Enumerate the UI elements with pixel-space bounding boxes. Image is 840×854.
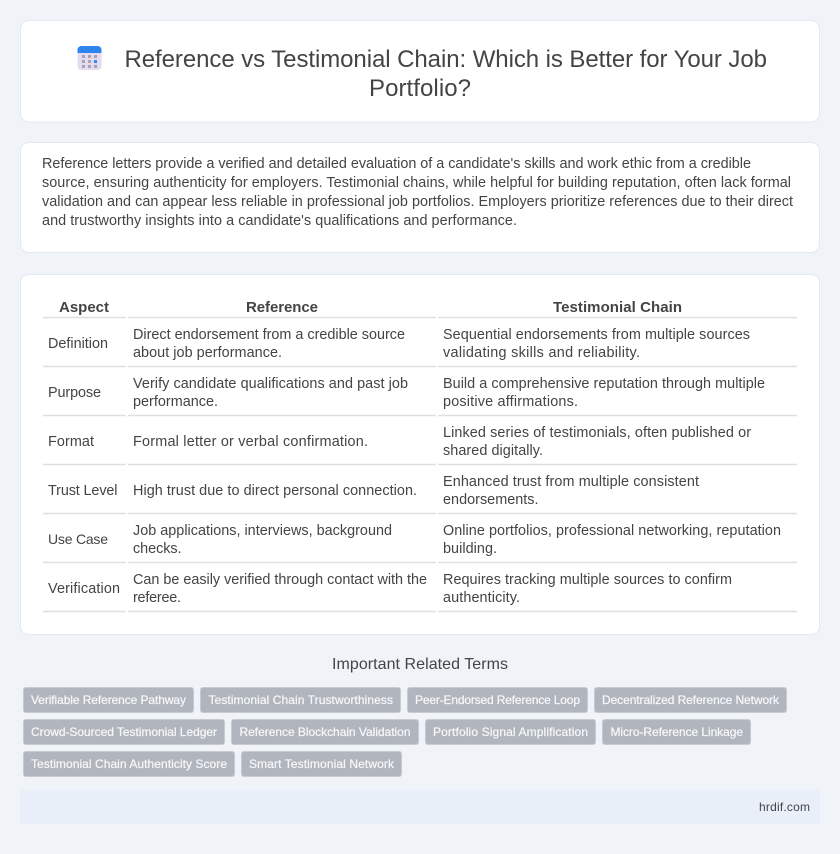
related terms tags	[24, 688, 786, 776]
title: Portfolio?	[369, 75, 471, 102]
panel: summary text	[20, 142, 820, 252]
tag	[426, 720, 596, 744]
tag	[24, 752, 234, 776]
row: trust level	[48, 474, 699, 508]
panel: comparison table	[20, 274, 820, 634]
row: definition: about job performance.	[133, 345, 282, 361]
icon: calendar	[78, 46, 102, 70]
panel: summary text: and trustworthy insights into a candidate's qualifications and performance.	[42, 213, 517, 229]
footer	[20, 790, 820, 824]
row: purpose: Verify candidate qualifications and past job	[133, 376, 408, 392]
title	[124, 46, 767, 102]
tag	[594, 688, 786, 712]
row: definition: validating skills and reliability.	[443, 345, 640, 361]
row: purpose: performance.	[133, 394, 218, 410]
row: trust level: endorsements.	[443, 492, 538, 508]
row: use case: Use Case	[48, 531, 108, 547]
row: verification	[48, 572, 732, 606]
row: use case: checks.	[133, 541, 182, 557]
row: verification: Can be easily verified through contact with the	[133, 572, 427, 588]
tag: Decentralized Reference Network	[602, 693, 780, 707]
row: purpose: positive affirmations.	[443, 394, 578, 410]
tag	[24, 688, 194, 712]
row: format: Linked series of testimonials, often published or	[443, 425, 751, 441]
tag: Reference Blockchain Validation	[240, 725, 410, 739]
tag: Testimonial Chain Authenticity Score	[31, 757, 227, 771]
row: purpose: Purpose	[48, 385, 101, 401]
row: use case: building.	[443, 541, 497, 557]
row: use case: Job applications, interviews, background	[133, 523, 392, 539]
row: verification: Requires tracking multiple sources to confirm	[443, 572, 732, 588]
tag	[408, 688, 588, 712]
row: definition: Definition	[48, 336, 108, 352]
tag: Micro-Reference Linkage	[610, 725, 743, 739]
panel: header	[20, 20, 820, 122]
row: format: Format	[48, 434, 94, 450]
row: trust level: High trust due to direct personal connection.	[133, 483, 417, 499]
row: definition: Sequential endorsements from multiple sources	[443, 327, 750, 343]
table header: Testimonial Chain	[553, 299, 682, 316]
row: format	[48, 425, 751, 459]
row: verification: Verification	[48, 581, 120, 597]
tag	[242, 752, 402, 776]
tag: Peer-Endorsed Reference Loop	[415, 693, 580, 707]
heading: related terms: Important Related Terms	[332, 656, 508, 673]
tag: Smart Testimonial Network	[249, 757, 395, 771]
footer: hrdif.com	[759, 800, 810, 814]
row: definition	[48, 327, 750, 361]
panel: summary text: validation and can appear less reliable in professional job portfolios. Employers prioritize references due to their direct	[42, 194, 793, 210]
row: definition: Direct endorsement from a credible source	[133, 327, 405, 343]
table header: Reference	[246, 299, 318, 316]
table header	[59, 299, 682, 316]
tag	[200, 688, 400, 712]
tag: Crowd-Sourced Testimonial Ledger	[31, 725, 217, 739]
row: purpose: Build a comprehensive reputation through multiple	[443, 376, 765, 392]
title: Reference vs Testimonial Chain: Which is Better for Your Job	[124, 46, 767, 73]
panel: summary text: source, ensuring authenticity for employers. Testimonial chains, while helpful for building reputation, often lack formal	[42, 175, 791, 191]
row: verification: authenticity.	[443, 590, 520, 606]
row: purpose	[48, 376, 765, 410]
row: trust level: Trust Level	[48, 483, 118, 499]
tag: Testimonial Chain Trustworthiness	[208, 693, 393, 707]
tag: Verifiable Reference Pathway	[31, 693, 186, 707]
row: use case	[48, 523, 781, 557]
tag	[602, 720, 750, 744]
tag	[24, 720, 224, 744]
row: verification: referee.	[133, 590, 181, 606]
panel: summary text: Reference letters provide a verified and detailed evaluation of a candidate's skills and work ethic from a credible	[42, 156, 751, 172]
row: trust level: Enhanced trust from multiple consistent	[443, 474, 699, 490]
row: use case: Online portfolios, professional networking, reputation	[443, 523, 781, 539]
row: format: shared digitally.	[443, 443, 543, 459]
table header: Aspect	[59, 299, 109, 316]
tag	[232, 720, 418, 744]
tag: Portfolio Signal Amplification	[433, 725, 588, 739]
row: format: Formal letter or verbal confirmation.	[133, 434, 368, 450]
